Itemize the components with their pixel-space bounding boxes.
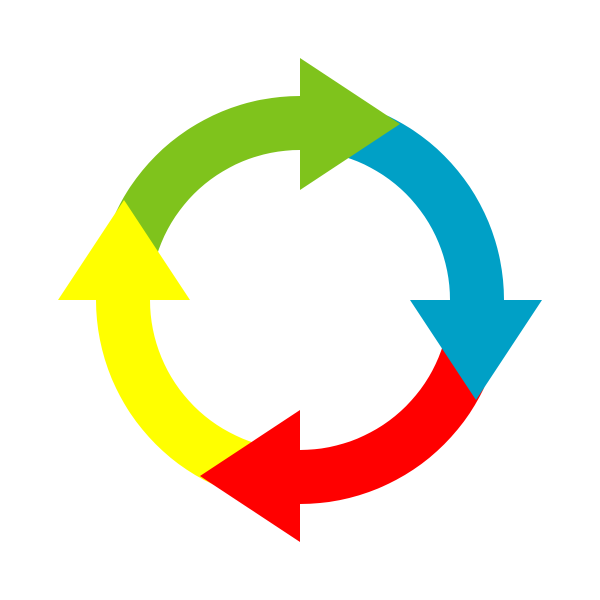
arrowhead: yellow [58,200,190,300]
arrowhead: red [200,410,300,542]
arrowhead: blue [410,300,542,400]
arc: red [300,300,504,504]
arc: green [96,96,300,300]
arrowhead: green [300,58,400,190]
arc: yellow [96,300,300,504]
arc: blue [300,96,504,300]
